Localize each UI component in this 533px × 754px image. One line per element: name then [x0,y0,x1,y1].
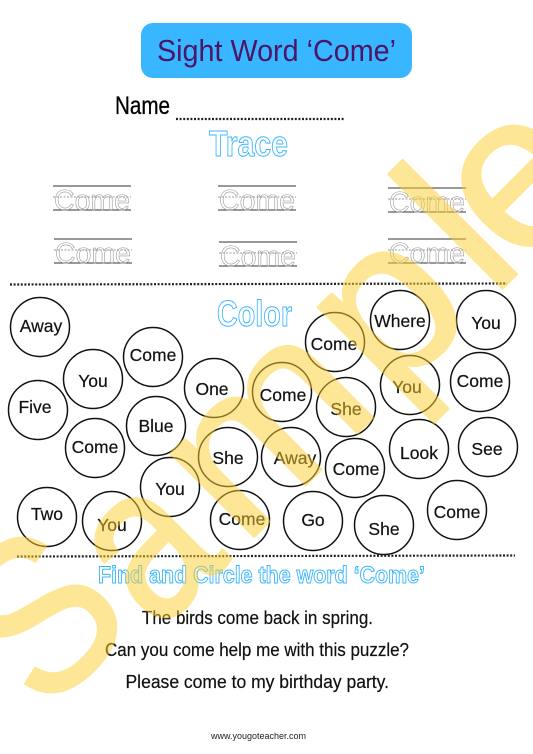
panel: color circles: Come [333,459,379,479]
panel: color circles: Come [434,502,480,522]
panel: color circles: You [392,377,422,397]
sentences [105,608,409,692]
trace word 1: Come [54,185,130,217]
watermark: Sample: p [250,172,512,434]
panel: color circles: You [155,479,185,499]
panel: color circles: Look [400,443,438,463]
trace word 4: Come [55,238,131,270]
panel: color circles: Five [18,397,52,417]
title: Sight Word ‘Come’ [157,33,396,68]
trace word 5: Come [220,241,296,273]
panel: color circles: She [212,448,244,468]
panel: color circles: She [368,519,400,539]
trace word 3: Come [389,187,465,219]
panel: color circles: You [97,515,127,535]
name field: Name [115,92,170,120]
panel: color circles: Come [457,371,503,391]
sentences: Please come to my birthday party. [126,672,389,692]
website footer: www.yougoteacher.com [210,731,306,741]
panel: color circles: Go [301,510,325,530]
panel: color circles: Two [31,504,63,524]
panel: color circles [8,290,518,554]
panel: color circles: Blue [138,416,174,436]
panel: color circles: You [78,371,108,391]
panel: color circles: Away [20,316,62,336]
panel: color circles: See [471,439,503,459]
panel: color circles: Come [130,345,176,365]
panel: color circles: Come [311,334,357,354]
panel: color circles: Come [219,509,265,529]
heading: Color: Color [217,293,292,334]
watermark: Sample: m [101,265,417,581]
panel: trace words [53,185,466,273]
panel: color circles: You [471,313,501,333]
sentences: The birds come back in spring. [142,608,373,628]
trace word 2: Come [219,185,295,217]
panel: color circles: Come [72,437,118,457]
panel: color circles: Where [374,311,426,331]
sentences: Can you come help me with this puzzle? [105,640,409,660]
title [141,23,412,78]
heading: Find and Circle: Find and Circle the word ‘Come’ [98,562,425,589]
panel: color circles: Come [260,385,306,405]
panel: color circles: Away [274,448,316,468]
trace word 6: Come [389,238,465,270]
panel: color circles: One [195,379,229,399]
panel: color circles: She [330,399,362,419]
watermark: Sample: a [15,416,265,667]
heading: Trace: Trace [209,123,288,164]
